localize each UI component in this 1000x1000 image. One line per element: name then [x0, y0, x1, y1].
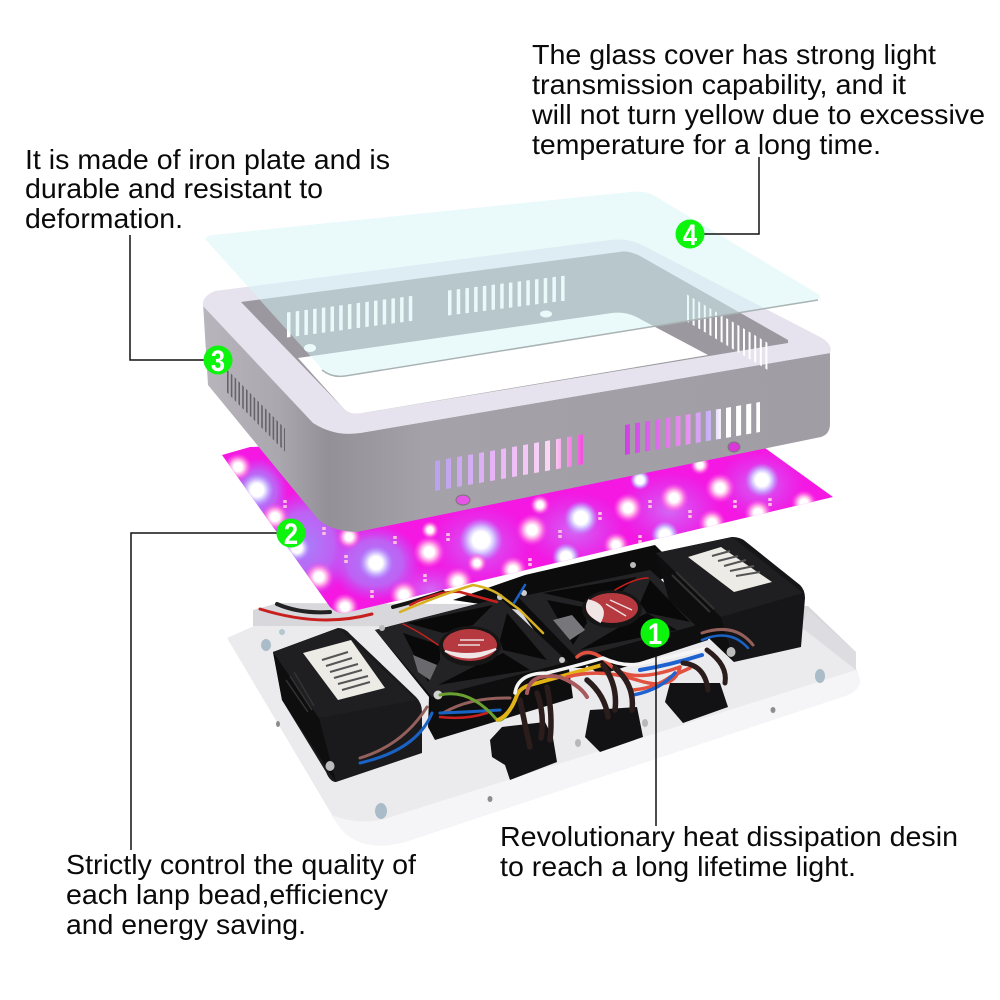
box wires: [702, 629, 753, 648]
text: glass cover: The glass cover has strong light: [532, 39, 936, 70]
badge 3: [204, 344, 232, 377]
small red bead pairs: [285, 498, 770, 600]
board wires: [393, 585, 543, 633]
text: lamp bead: each lanp bead,efficiency: [66, 879, 388, 910]
box label: [303, 640, 385, 700]
fan 1: [375, 594, 573, 740]
callout 1 leader: [655, 646, 657, 826]
metal frame: [203, 240, 831, 532]
callout 3 leader: [130, 235, 205, 360]
LED beads: [224, 453, 817, 621]
LED board: [222, 446, 833, 614]
fan hub label: [582, 590, 642, 628]
text: glass cover: transmission capability, and it: [532, 69, 906, 100]
power box left: [273, 628, 422, 782]
text: iron plate: deformation.: [25, 203, 183, 234]
badge 2: 2: [284, 517, 298, 550]
power box right: [656, 537, 805, 662]
box label: [688, 547, 772, 592]
text: heat dissipation: Revolutionary heat dissipation desin: [500, 821, 958, 852]
text: lamp bead: and energy saving.: [66, 909, 306, 940]
text: glass cover: temperature for a long time.: [532, 129, 881, 160]
purple glow: [238, 456, 798, 598]
frame opening floor: [298, 313, 708, 414]
frame top face: [203, 240, 831, 434]
rear black panel behind fans: [453, 545, 680, 668]
text: lamp bead: Strictly control the quality of: [66, 849, 416, 880]
text: glass cover: will not turn yellow due to excessive: [531, 99, 985, 130]
text: iron plate: durable and resistant to: [25, 173, 323, 204]
glass cover: [206, 192, 820, 376]
rear wires: [260, 604, 372, 620]
front vents: [435, 417, 760, 505]
mounting screws: [261, 629, 825, 819]
switch left: [490, 722, 557, 780]
callout 4 leader: [704, 157, 759, 234]
text: iron plate: It is made of iron plate and is: [25, 144, 390, 175]
badge 4: 4: [683, 218, 698, 251]
back wall vents: [287, 288, 771, 358]
callout 2 leader: [131, 533, 278, 850]
text: heat dissipation: to reach a long lifetime light.: [500, 851, 856, 882]
base plate: [227, 603, 860, 846]
badge 1: [640, 617, 670, 650]
switch middle: [585, 707, 643, 752]
fan hub label: [439, 626, 501, 666]
badge 3: 3: [211, 344, 225, 377]
fan 2: [518, 562, 708, 675]
frame side walls: [203, 303, 830, 532]
text: heat dissipation: [500, 821, 958, 882]
text: glass cover: [531, 39, 985, 160]
wire bundle: [360, 648, 725, 763]
left side vents: [227, 381, 285, 440]
text: iron plate: [25, 144, 390, 234]
switch right: [665, 683, 728, 723]
badge 1: 1: [648, 617, 662, 650]
frame opening wall: [241, 252, 788, 414]
text: lamp bead: [66, 849, 416, 940]
badge 2: [276, 517, 306, 550]
badge 4: [676, 218, 704, 251]
